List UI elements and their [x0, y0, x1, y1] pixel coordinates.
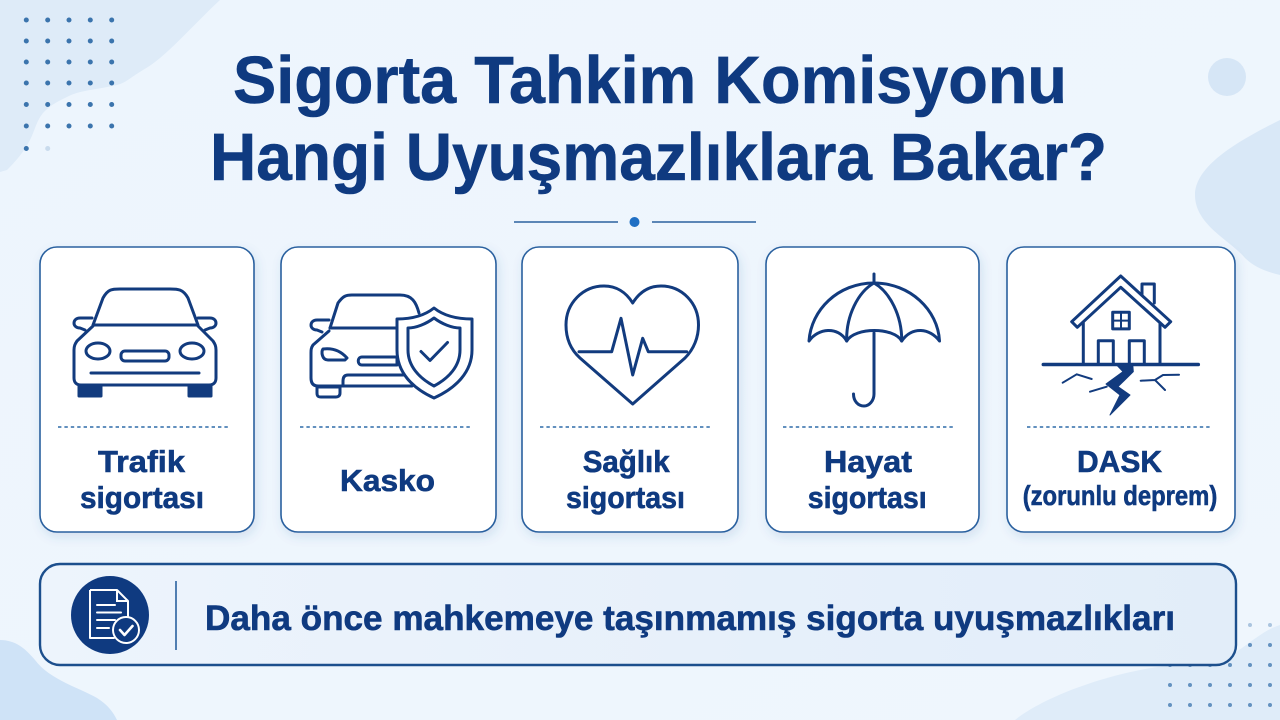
label [566, 444, 685, 515]
panel: dask [1007, 247, 1235, 532]
panel: hayat sigortası [766, 247, 979, 532]
icon: car with shield [311, 295, 472, 398]
label: Sağlık [583, 444, 670, 479]
title: Sigorta Tahkim Komisyonu [233, 43, 1067, 118]
icon: house with earthquake crack [1043, 276, 1198, 415]
label [80, 444, 204, 515]
label: Hayat [824, 444, 912, 479]
label: sigortası [566, 480, 685, 515]
callout banner [40, 564, 1236, 665]
icon: umbrella [809, 274, 940, 406]
dot grid bottom right [1168, 623, 1272, 707]
panel: sağlık sigortası [522, 247, 738, 532]
banner text: Daha önce mahkemeye taşınmamış sigorta uyuşmazlıkları [205, 599, 1175, 638]
label: Kasko [340, 463, 435, 498]
label: DASK [1077, 444, 1163, 479]
title: Hangi Uyuşmazlıklara Bakar? [210, 120, 1107, 195]
icon: car [74, 289, 216, 396]
dot grid top left [24, 18, 114, 151]
icon: heart with pulse [566, 286, 698, 404]
label: sigortası [808, 480, 927, 515]
label: sigortası [80, 480, 204, 515]
panel: trafik sigortası [40, 247, 254, 532]
icon: document with check [71, 576, 149, 654]
label: (zorunlu deprem) [1023, 480, 1217, 511]
label [808, 444, 927, 515]
title [210, 43, 1107, 195]
panel: kasko [281, 247, 496, 532]
label: Trafik [98, 444, 186, 479]
title divider [514, 217, 756, 227]
label [1023, 444, 1217, 511]
